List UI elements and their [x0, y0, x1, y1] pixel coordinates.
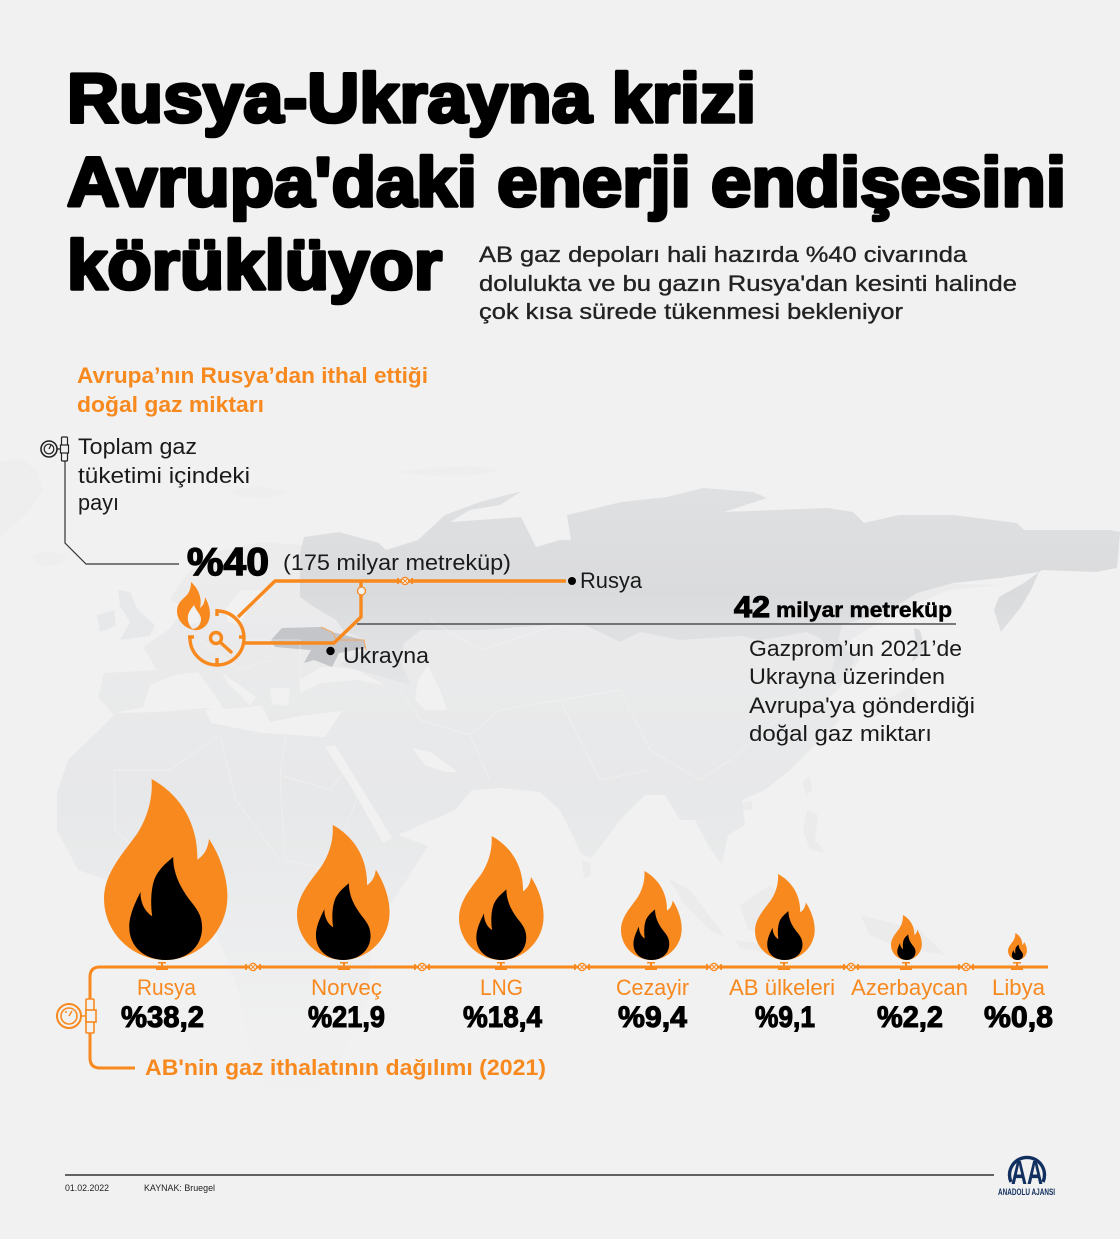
- logo: Anadolu Ajansi: ANADOLU AJANSI: [998, 1187, 1055, 1197]
- text: share of total gas consumption: payı: [78, 490, 119, 515]
- footer: [65, 1175, 994, 1194]
- footer: 01.02.2022: [65, 1183, 109, 1194]
- icon: valve on branch pipe: [358, 587, 366, 595]
- label: Libya share: %0,8: [984, 1001, 1053, 1034]
- label: EU countries share: %9,1: [755, 1001, 815, 1034]
- label: LNG share: %18,4: [463, 1001, 542, 1034]
- title: [67, 59, 1066, 304]
- map: Sakhalin: [912, 628, 925, 662]
- stat: 42 billion cubic metres: milyar metreküp: [776, 599, 952, 622]
- logo: Anadolu Ajansi: AA: [1011, 1154, 1043, 1191]
- pipeline under flames: [90, 962, 1048, 1068]
- label: Azerbaijan share: %2,2: [877, 1001, 943, 1034]
- text: Gazprom description: Avrupa'ya gönderdiği: [749, 693, 975, 718]
- text: Gazprom description: [749, 636, 975, 746]
- pipeline diagram to Europe: [177, 577, 956, 665]
- label: Russia share: %38,2: [121, 1001, 204, 1034]
- text: Gazprom description: Gazprom’un 2021’de: [749, 636, 962, 661]
- text: Gazprom description: doğal gaz miktarı: [749, 721, 932, 746]
- logo: Anadolu Ajansi: [998, 1154, 1055, 1197]
- label: Russia share: [121, 975, 204, 1034]
- world map background: [0, 458, 1120, 1100]
- heading: Russian gas imports: doğal gaz miktarı: [77, 392, 264, 417]
- label: Libya share: Libya: [992, 975, 1045, 1000]
- flame: EU countries: [755, 874, 815, 960]
- map: Ukraine east border: [321, 627, 366, 650]
- text: share of total gas consumption: [78, 434, 250, 515]
- label: Norway share: Norveç: [311, 975, 382, 1000]
- stat: 42 billion cubic metres: [734, 591, 952, 624]
- line: Ukraine stat leader: [357, 623, 956, 625]
- stat: 40 percent: [187, 541, 511, 584]
- subtitle: AB gaz depoları hali hazırda %40 civarında: [479, 242, 968, 267]
- subtitle: [479, 242, 1017, 324]
- map: Greenland and Iceland: [0, 458, 502, 566]
- title: körüklüyor: [67, 226, 442, 304]
- icon: valve on main pipe: [395, 577, 415, 585]
- label: LNG share: LNG: [480, 975, 523, 1000]
- label: Algeria share: [616, 975, 689, 1034]
- subtitle: çok kısa sürede tükenmesi bekleniyor: [479, 299, 904, 324]
- label: Libya share: [984, 975, 1053, 1034]
- text: share of total gas consumption: tüketimi içindeki: [78, 463, 250, 488]
- text: Gazprom description: Ukrayna üzerinden: [749, 664, 945, 689]
- heading: Russian gas imports: [77, 363, 428, 417]
- flame: Azerbaijan: [891, 915, 922, 960]
- pipeline routes: [238, 581, 566, 643]
- label: Algeria share: Cezayir: [616, 975, 689, 1000]
- map: country borders: [114, 620, 800, 875]
- label: Azerbaijan share: Azerbaycan: [851, 975, 968, 1000]
- label: Algeria share: %9,4: [618, 1001, 687, 1034]
- flame: LNG: [459, 836, 544, 960]
- title: Avrupa'daki enerji endişesini: [67, 143, 1066, 221]
- label: Azerbaijan share: [851, 975, 968, 1034]
- icon: gauge with callout line: [41, 437, 179, 564]
- map: seas: [114, 590, 458, 843]
- map: Russia: [300, 488, 1120, 688]
- label: Russia share: Rusya: [137, 975, 196, 1000]
- label: Ukraine: Ukrayna: [343, 643, 429, 668]
- stat: 40 percent: %40: [187, 541, 269, 584]
- map: Eurasia and Africa land: [57, 542, 1000, 1100]
- heading: Russian gas imports: Avrupa’nın Rusya’dan ithal ettiği: [77, 363, 428, 388]
- flame chart: EU gas import shares: [104, 779, 1027, 960]
- heading: EU gas import breakdown: AB'nin gaz ithalatının dağılımı (2021): [145, 1055, 546, 1080]
- flame: Libya: [1008, 933, 1027, 960]
- text: share of total gas consumption: Toplam gaz: [78, 434, 197, 459]
- map: UK and Ireland: [97, 590, 155, 640]
- label: EU countries share: [729, 975, 835, 1034]
- icon: gauge ring with key: [188, 609, 244, 665]
- stat: 42 billion cubic metres: 42: [734, 591, 770, 624]
- stat: 40 percent: (175 milyar metreküp): [283, 550, 511, 575]
- map: Ukraine: [271, 627, 366, 667]
- flame: Algeria: [621, 871, 682, 960]
- footer: KAYNAK: Bruegel: [144, 1183, 215, 1194]
- subtitle: dolulukta ve bu gazın Rusya'dan kesinti halinde: [479, 271, 1017, 296]
- icon: orange gauge: [57, 999, 96, 1033]
- label: EU countries share: AB ülkeleri: [729, 975, 835, 1000]
- map: Southeast Asia islands: [582, 685, 945, 955]
- label: Russia: Rusya: [580, 568, 642, 593]
- label: LNG share: [463, 975, 542, 1034]
- icon: small flame: [177, 582, 210, 630]
- label: Norway share: %21,9: [308, 1001, 385, 1034]
- label: Norway share: [308, 975, 385, 1034]
- flame: Russia: [104, 779, 227, 960]
- title: Rusya-Ukrayna krizi: [67, 59, 756, 137]
- flame: Norway: [297, 825, 390, 960]
